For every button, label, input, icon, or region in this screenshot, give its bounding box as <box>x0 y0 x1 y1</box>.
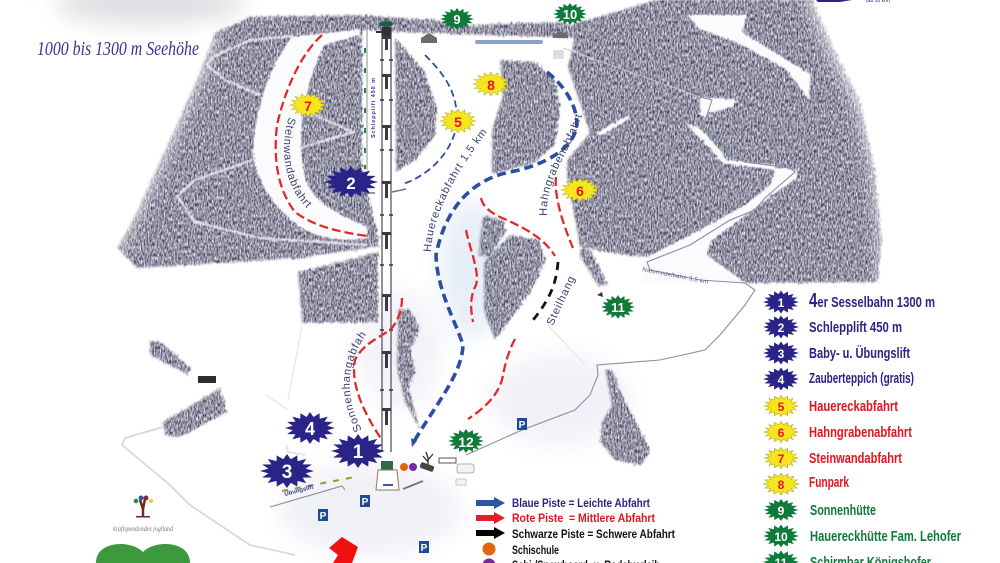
label Sonnenhangabfahrt: Sonnenhangabfahrt <box>342 332 366 432</box>
blue pistes <box>403 55 577 447</box>
label Steinwandabfahrt: Steinwandabfahrt <box>284 118 312 208</box>
marker 7: 7 <box>304 98 312 114</box>
blue piste key <box>476 497 650 510</box>
snow track lines <box>266 325 585 410</box>
red piste key: Rote Piste = Mittlere Abfahrt <box>512 513 655 525</box>
red piste key <box>476 512 655 525</box>
legend item 2: 2 <box>778 321 785 335</box>
forest: right hillside <box>567 0 882 283</box>
label Hahngrabenabfahrt: Hahngrabenabfahrt <box>539 114 582 215</box>
legend item 3 <box>763 342 910 364</box>
label Hauereckabfahrt: Hauereckabfahrt 1,5 km <box>423 130 487 252</box>
marker 10 <box>553 3 587 25</box>
legend item 6: 6 <box>778 426 785 440</box>
P: P <box>320 511 327 522</box>
legend item 6 <box>764 422 912 442</box>
forest: summit strip <box>215 15 578 38</box>
clearing top right <box>687 15 811 100</box>
marker 6: 6 <box>576 183 584 199</box>
forest: narrow strip <box>397 310 420 430</box>
toboggan track <box>466 48 795 455</box>
legend item 7: Steinwandabfahrt <box>809 450 902 467</box>
forest: between lift and blue run <box>395 38 437 172</box>
ski traverses <box>177 36 368 245</box>
marker 8: 8 <box>487 77 495 93</box>
P: P <box>421 543 428 554</box>
base buildings <box>198 292 603 489</box>
marker 8 <box>473 72 509 96</box>
marker 10: 10 <box>563 7 577 22</box>
legend item 10 <box>763 524 961 548</box>
tow lift label: Schlepplift 450 m <box>371 78 377 138</box>
logo Joglland <box>113 496 173 533</box>
legend item 6: Hahngrabenabfahrt <box>809 424 912 441</box>
P <box>419 541 429 554</box>
marker 3: 3 <box>282 462 292 483</box>
legend item 3: 3 <box>778 347 785 361</box>
P <box>360 495 370 508</box>
forest: near Schirmbar <box>580 248 608 286</box>
fades at hillside edges <box>108 0 898 290</box>
forest: left hut upper <box>150 340 191 375</box>
lift towers <box>382 36 391 425</box>
huts at summit <box>421 31 568 59</box>
snow clearings and runs <box>177 15 811 283</box>
forest: left slope <box>117 30 378 268</box>
forest: lower right <box>600 369 650 465</box>
legend item 5 <box>764 396 898 416</box>
marker 7 <box>290 93 326 117</box>
legend item 10: 10 <box>774 530 788 544</box>
baby lift <box>270 477 355 507</box>
legend item 1 <box>763 290 935 314</box>
label Naturrodelbahn: Naturrodelbahn 3,5 km <box>642 267 709 286</box>
legend: piste types <box>476 497 675 563</box>
marker 11 <box>601 295 635 319</box>
road to hut <box>122 427 295 555</box>
legend item 4: Zauberteppich (gratis) <box>809 370 914 387</box>
legend item 1: 4er Sesselbahn 1300 m <box>809 290 935 312</box>
lift label: Übungslift <box>284 483 314 498</box>
elevation title: 1000 bis 1300 m Seehöhe <box>37 38 199 60</box>
forest: centre <box>492 60 560 174</box>
marker 4: 4 <box>305 419 315 439</box>
legend item 5: Hauereckabfahrt <box>809 398 898 415</box>
service dots <box>400 463 417 471</box>
legend item 1: 1 <box>778 296 785 310</box>
P: P <box>362 497 369 508</box>
legend item 8: Funpark <box>809 474 849 491</box>
piste labels <box>284 114 582 432</box>
bare tree <box>423 452 433 470</box>
red entry arrow <box>329 537 358 563</box>
P <box>318 509 328 522</box>
forest: small patch mid <box>478 216 505 256</box>
forests <box>117 0 882 465</box>
rental key <box>482 558 660 563</box>
legend item 7 <box>764 448 902 468</box>
red pistes <box>276 35 573 440</box>
legend item 2: Schlepplift 450 m <box>809 319 902 336</box>
legend item 8 <box>763 473 849 495</box>
label Steilhang: Steilhang <box>546 276 576 325</box>
forest: lower centre <box>484 235 545 340</box>
marker 5: 5 <box>454 114 462 130</box>
ski school key <box>482 542 559 557</box>
legend item 2 <box>763 316 902 338</box>
marker 12: 12 <box>458 434 474 450</box>
magic carpet <box>286 445 305 455</box>
marker 2: 2 <box>346 174 356 193</box>
marker 11: 11 <box>611 300 625 315</box>
small clearing <box>597 115 630 136</box>
Steinwand run corridor <box>253 29 367 240</box>
snow wedge along toboggan <box>640 168 797 283</box>
legend item 9: Sonnenhütte <box>810 502 876 519</box>
marker 1 <box>331 434 385 468</box>
legend item 3: Baby- u. Übungslift <box>809 345 910 362</box>
forest: below lift left <box>298 252 378 323</box>
black piste key <box>476 527 675 541</box>
marker 9 <box>440 8 474 30</box>
P <box>517 418 527 431</box>
green heart logo <box>96 544 190 563</box>
lake <box>475 40 543 44</box>
upper toboggan clearing <box>700 97 738 118</box>
black piste <box>530 262 558 324</box>
legend item 9 <box>764 499 876 521</box>
valley station <box>376 461 399 490</box>
legend item 4: 4 <box>778 373 785 387</box>
map markers <box>260 3 635 488</box>
black piste key: Schwarze Piste = Schwere Abfahrt <box>512 529 675 541</box>
blue piste key: Blaue Piste = Leichte Abfahrt <box>512 498 650 510</box>
legend item 4 <box>763 368 914 390</box>
marker 4 <box>285 412 335 444</box>
marker 9: 9 <box>453 12 461 27</box>
fragment of header graphic top right <box>816 0 890 4</box>
forest: left hut lower <box>163 388 227 437</box>
parking signs <box>318 418 527 554</box>
legend item 5: 5 <box>778 400 785 414</box>
legend: numbered list <box>763 290 961 563</box>
chair lift with towers <box>366 21 406 452</box>
marker 6 <box>561 178 599 202</box>
marker 2 <box>324 166 378 198</box>
legend item 7: 7 <box>778 452 785 466</box>
tow lift <box>365 30 377 170</box>
marker 3 <box>260 454 314 488</box>
top station <box>379 21 393 27</box>
winding track clearing <box>684 122 775 170</box>
logo caption: kraftspendendes joglland <box>113 524 173 533</box>
marker 5 <box>440 109 476 133</box>
ski school key: Schischule <box>512 545 559 557</box>
legend item 8: 8 <box>778 478 785 492</box>
marker 12 <box>448 429 484 453</box>
P: P <box>519 420 526 431</box>
legend item 9: 9 <box>778 504 785 518</box>
legend item 11 <box>763 550 931 563</box>
marker 1: 1 <box>353 442 364 463</box>
